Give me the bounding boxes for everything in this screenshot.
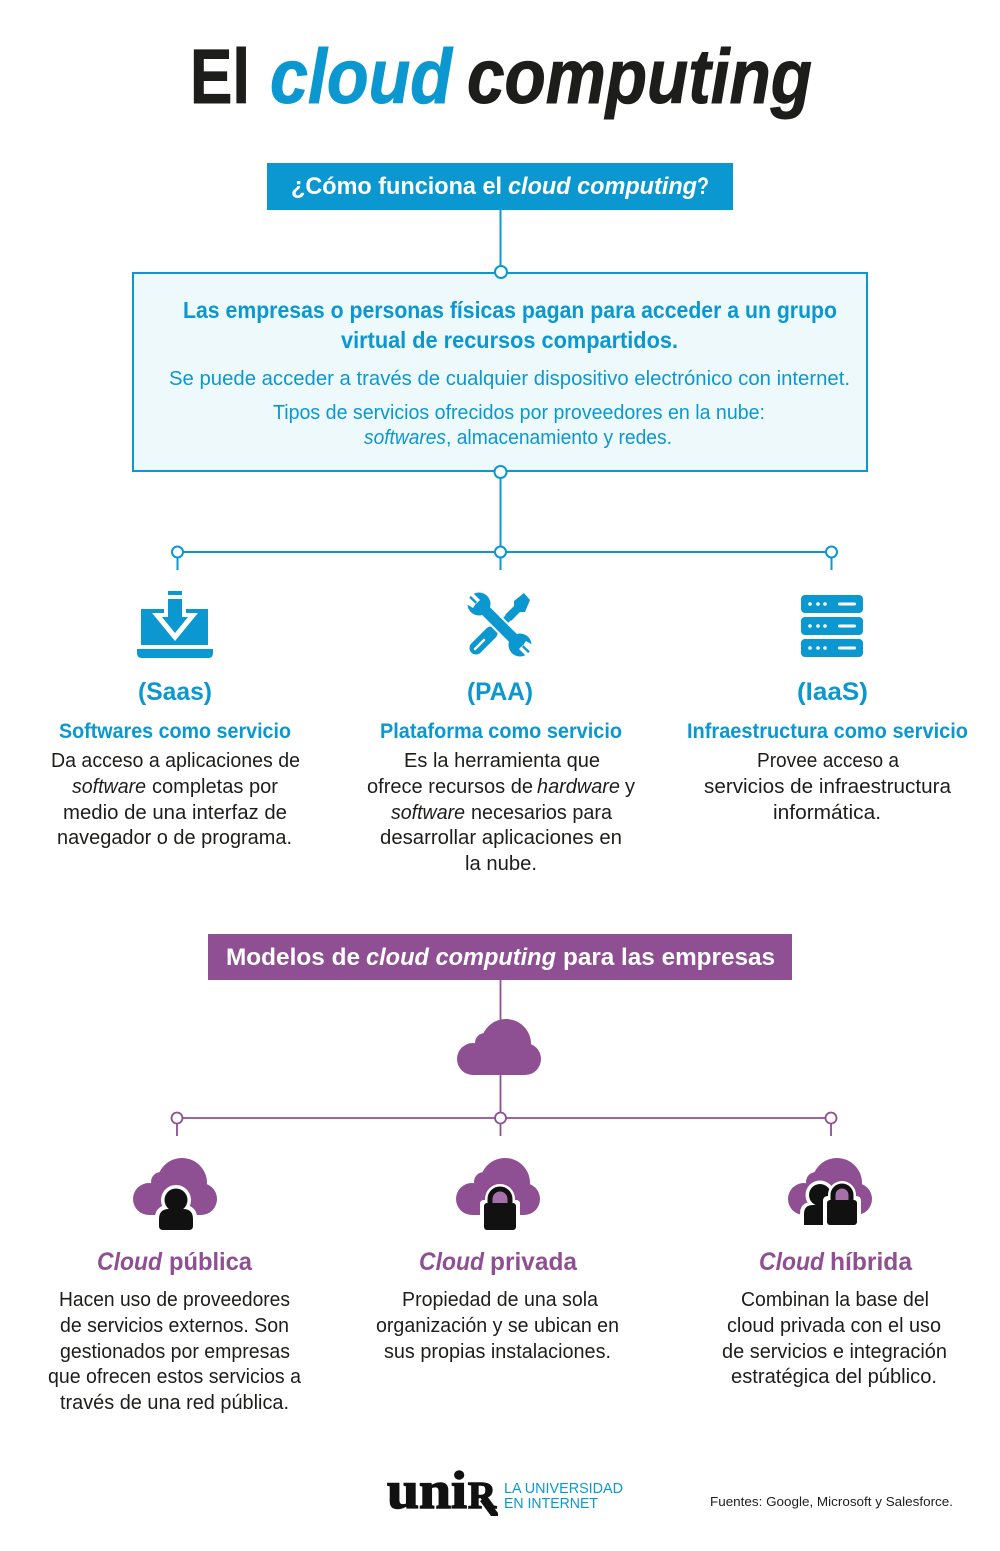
column: SaaS: (Saas) <box>138 678 212 706</box>
box text: Tipos de servicios ofrecidos por proveedores en la nube: <box>273 402 765 424</box>
column: public cloud: de servicios externos. Son <box>60 1315 289 1337</box>
title: computing <box>467 34 812 120</box>
column: public cloud: Hacen uso de proveedores <box>59 1289 290 1311</box>
column: IaaS: (IaaS) <box>797 678 868 706</box>
column: SaaS: medio de una interfaz de <box>63 802 287 824</box>
box headline <box>183 297 837 353</box>
column: PaaS: la nube. <box>465 853 537 875</box>
heading banner: models: para las empresas <box>563 944 775 971</box>
panel: explanation box <box>133 273 867 471</box>
column: PaaS: Plataforma como servicio <box>380 720 622 743</box>
column: PaaS: necesarios para <box>471 802 613 824</box>
column: IaaS: Provee acceso a <box>757 750 900 772</box>
connector tree: models <box>172 980 836 1136</box>
heading banner: models: cloud computing <box>366 944 556 971</box>
heading banner: models: Modelos de <box>226 944 360 971</box>
column: public cloud: gestionados por empresas <box>60 1341 290 1363</box>
column: private cloud <box>376 1248 619 1363</box>
column: PaaS <box>367 678 635 875</box>
icon: hybrid cloud with person and lock <box>788 1158 872 1228</box>
column: SaaS <box>51 678 300 849</box>
logo: unir: uni <box>387 1462 467 1520</box>
heading banner: how it works: cloud computing <box>508 173 697 200</box>
box text <box>169 368 850 449</box>
icon: wrench and screwdriver <box>463 590 536 659</box>
title: cloud <box>270 34 454 120</box>
column: IaaS <box>687 678 968 824</box>
logo: unir <box>387 1462 623 1520</box>
column: IaaS: informática. <box>773 802 881 824</box>
column: public cloud: través de una red pública. <box>60 1392 289 1414</box>
column: public cloud <box>48 1248 302 1414</box>
connector: banner to box <box>500 210 502 267</box>
heading banner: models <box>208 934 792 980</box>
column: hybrid cloud: cloud privada con el uso <box>727 1315 941 1337</box>
column: PaaS: y <box>625 776 635 798</box>
icon: laptop download <box>137 591 213 658</box>
column: PaaS: Es la herramienta que <box>404 750 600 772</box>
column: SaaS: navegador o de programa. <box>57 827 292 849</box>
column: private cloud: sus propias instalaciones. <box>384 1341 611 1363</box>
box text: , almacenamiento y redes. <box>446 427 672 449</box>
box text: Se puede acceder a través de cualquier dispositivo electrónico con internet. <box>169 368 850 390</box>
heading banner: how it works: ? <box>697 173 709 200</box>
column: hybrid cloud <box>722 1248 947 1388</box>
column: private cloud: privada <box>490 1248 578 1276</box>
column: private cloud: Propiedad de una sola <box>402 1289 599 1311</box>
title <box>190 34 812 120</box>
column: IaaS: Infraestructura como servicio <box>687 720 968 743</box>
column: public cloud: Cloud <box>97 1248 163 1276</box>
column: PaaS: (PAA) <box>467 678 533 706</box>
heading banner: how it works <box>267 163 733 210</box>
column: PaaS: hardware <box>537 776 620 798</box>
box headline: virtual de recursos compartidos. <box>341 327 678 353</box>
box headline: Las empresas o personas físicas pagan para acceder a un grupo <box>183 297 837 323</box>
column: private cloud: organización y se ubican en <box>376 1315 619 1337</box>
column: PaaS: desarrollar aplicaciones en <box>380 827 622 849</box>
column: PaaS: software <box>391 802 465 824</box>
column: hybrid cloud: de servicios e integración <box>722 1341 947 1363</box>
title: El <box>190 34 250 120</box>
logo: unir: LA UNIVERSIDAD <box>504 1480 623 1497</box>
icon: central cloud <box>457 1019 541 1075</box>
column: SaaS: Softwares como servicio <box>59 720 291 743</box>
column: private cloud: Cloud <box>419 1248 485 1276</box>
column: public cloud: pública <box>169 1248 253 1276</box>
connector tree: service types <box>172 466 837 570</box>
column: hybrid cloud: Cloud <box>759 1248 825 1276</box>
column: PaaS: ofrece recursos de <box>367 776 533 798</box>
icon: server rack <box>801 595 863 657</box>
column: SaaS: software <box>72 776 146 798</box>
column: hybrid cloud: Combinan la base del <box>741 1289 929 1311</box>
column: public cloud: que ofrecen estos servicios a <box>48 1366 302 1388</box>
column: SaaS: completas por <box>152 776 278 798</box>
column: SaaS: Da acceso a aplicaciones de <box>51 750 300 772</box>
logo: unir: EN INTERNET <box>504 1495 598 1512</box>
column: hybrid cloud: estratégica del público. <box>731 1366 937 1388</box>
node: box top <box>495 266 507 278</box>
icon: private cloud with lock <box>456 1158 540 1233</box>
logo: unir: R <box>468 1475 497 1517</box>
heading banner: how it works: ¿Cómo funciona el <box>291 173 502 200</box>
column: IaaS: servicios de infraestructura <box>704 776 952 798</box>
column: hybrid cloud: híbrida <box>830 1248 913 1276</box>
sources note: Fuentes: Google, Microsoft y Salesforce. <box>710 1494 953 1509</box>
box text: softwares <box>364 427 446 449</box>
icon: public cloud with person <box>133 1158 217 1232</box>
